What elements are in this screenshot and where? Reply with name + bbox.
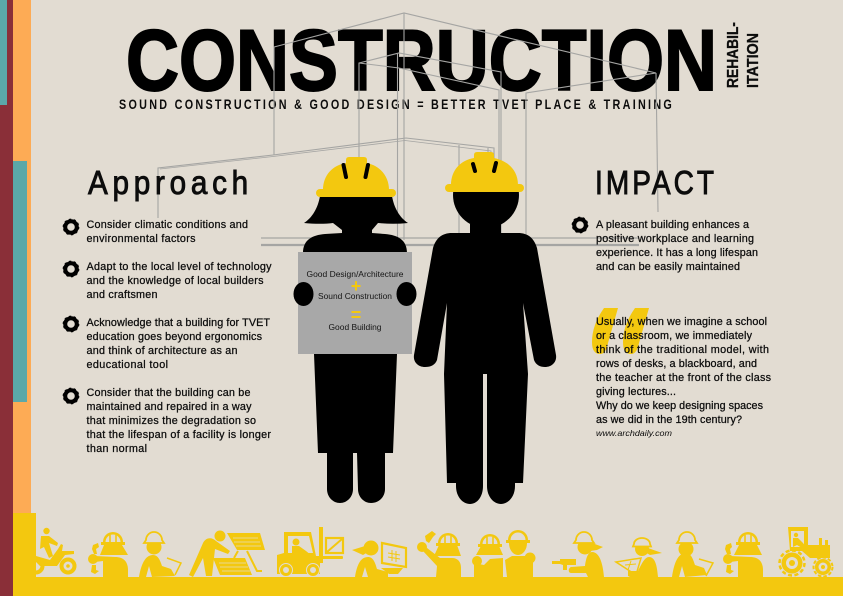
icon: gear bullet 2 xyxy=(63,261,79,277)
figure: man xyxy=(414,152,556,504)
approach item 3: educational tool xyxy=(86,359,168,371)
icon: woman with wrench xyxy=(88,532,128,577)
rotated title suffix: REHABIL- xyxy=(725,22,742,88)
approach item 4: that minimizes the degradation so xyxy=(86,415,256,427)
heading: impact: IMPACT xyxy=(595,165,714,202)
approach item 1 xyxy=(86,219,248,245)
quote text: the teacher at the front of the class xyxy=(596,372,772,384)
approach item 2: and the knowledge of local builders xyxy=(86,275,264,287)
approach item 3: and think of architecture as an xyxy=(86,345,238,357)
icon: man with tablet xyxy=(139,532,181,577)
approach item 3 xyxy=(86,317,270,371)
icon: woman at monitor xyxy=(352,540,406,577)
sign: Good Design/Architecture xyxy=(306,269,404,279)
icon: gear bullet 1 xyxy=(63,219,79,235)
icon: quotation marks xyxy=(592,308,649,354)
woman body xyxy=(303,196,408,503)
quote text: rows of desks, a blackboard, and xyxy=(596,358,757,370)
woman hard hat xyxy=(316,157,396,197)
approach item 4: that the lifespan of a facility is longer xyxy=(86,429,271,441)
sign xyxy=(298,252,412,354)
yellow workers band xyxy=(13,513,843,596)
icon: gear bullet 4 xyxy=(63,388,79,404)
approach item 2 xyxy=(86,261,272,301)
approach item 2: Adapt to the local level of technology xyxy=(86,261,272,273)
icon: gear bullet impact xyxy=(572,217,588,233)
woman hands xyxy=(294,282,416,306)
quote text: or a classroom, we immediately xyxy=(596,330,753,342)
impact text: A pleasant building enhances a xyxy=(596,219,749,231)
approach item 4: than normal xyxy=(86,443,147,455)
icon: woman with wrench 2 xyxy=(723,532,763,577)
impact text xyxy=(596,219,758,273)
quote text: Usually, when we imagine a school xyxy=(596,316,767,328)
approach item 4: Consider that the building can be xyxy=(86,387,250,399)
sign: + xyxy=(351,276,361,296)
icon: motorbike rider xyxy=(30,528,74,572)
approach item 2: and craftsmen xyxy=(86,289,158,301)
approach item 1: environmental factors xyxy=(86,233,196,245)
icon: man with clipboard xyxy=(672,532,713,577)
icon: man with drill xyxy=(552,532,604,577)
impact text: positive workplace and learning xyxy=(596,233,754,245)
building wireframe xyxy=(158,13,658,245)
quote text: giving lectures... xyxy=(596,386,676,398)
icon: worker with solar panels xyxy=(189,530,265,577)
sign: = xyxy=(351,305,361,325)
heading: approach: Approach xyxy=(88,165,248,201)
approach item 4 xyxy=(86,387,271,455)
approach item 3: education goes beyond ergonomics xyxy=(86,331,263,343)
man hard hat xyxy=(445,152,524,192)
quote text: as we did in the 19th century? xyxy=(596,414,742,426)
icon: two workers xyxy=(472,530,536,577)
approach item 4: maintained and repaired in a way xyxy=(86,401,252,413)
title: CONSTRUCTION xyxy=(126,13,717,109)
icon: tractor xyxy=(780,527,832,576)
quote text: think of the traditional model, with xyxy=(596,344,769,356)
quote text: Why do we keep designing spaces xyxy=(596,400,764,412)
quote text: www.archdaily.com xyxy=(596,428,672,438)
icon: woman raising wrench xyxy=(417,531,461,577)
left block xyxy=(13,513,36,596)
rotated title suffix: ITATION xyxy=(745,33,762,88)
impact text: and can be easily maintained xyxy=(596,261,740,273)
subtitle: SOUND CONSTRUCTION & GOOD DESIGN = BETTER TVET PLACE & TRAINING xyxy=(119,97,672,112)
man body xyxy=(414,162,556,504)
left colour strips xyxy=(0,0,31,596)
approach item 1: Consider climatic conditions and xyxy=(86,219,248,231)
sign: Good Building xyxy=(328,322,382,332)
quote text xyxy=(596,316,772,438)
icon: gear bullet 3 xyxy=(63,316,79,332)
rotated title suffix xyxy=(725,22,762,88)
sign: Sound Construction xyxy=(318,291,392,301)
icon: forklift xyxy=(277,527,343,577)
icon: woman with blueprint xyxy=(616,538,662,577)
figure: woman holding sign xyxy=(294,157,416,503)
approach item 3: Acknowledge that a building for TVET xyxy=(86,317,270,329)
impact text: experience. It has a long lifespan xyxy=(596,247,758,259)
approach list xyxy=(63,219,272,455)
